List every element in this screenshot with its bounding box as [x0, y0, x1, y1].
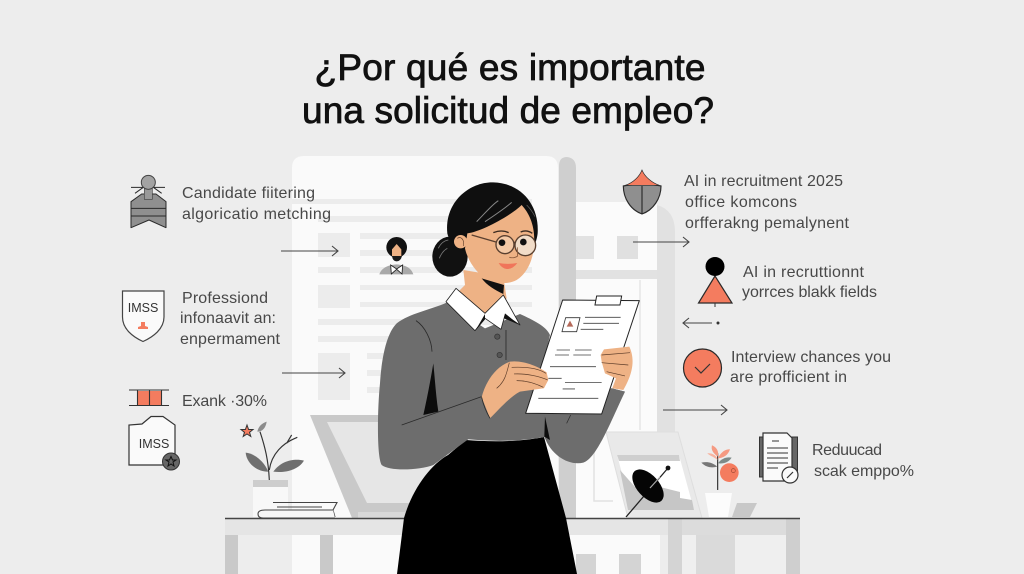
illustration: background documents [292, 156, 675, 520]
text: AI in recruitment: office komcons [685, 194, 797, 211]
text: candidate filtering: Candidate fiitering [182, 185, 315, 202]
illustration: desk [225, 518, 800, 574]
paper [526, 300, 639, 414]
text: AI in recruitment: AI in recruitment 2025 [684, 173, 843, 190]
illustration: laptop on desk [310, 415, 440, 518]
illustration: picture frame with black leaf [594, 432, 702, 518]
icon: coral columns [129, 390, 169, 406]
text: exank: Exank ·30% [182, 393, 267, 410]
text: professional [180, 290, 281, 348]
text: reduced: Reduucad [812, 442, 882, 459]
text: reduced [812, 442, 914, 480]
arrow [633, 237, 689, 247]
icon: coral check circle [684, 349, 722, 387]
illustration: potted plant right [701, 445, 757, 517]
illustration: small candidate avatar [379, 237, 413, 274]
icon: IMSS card [129, 416, 180, 470]
text: blank fields: AI in recruttionnt [743, 264, 865, 281]
text: blank fields: yorrces blakk fields [742, 284, 877, 301]
text: candidate filtering: algoricatio metching [182, 206, 331, 223]
arrow [281, 246, 338, 256]
collar [446, 288, 520, 331]
text: reduced: scak emppo% [814, 463, 914, 480]
text: interview chances: are profficient in [730, 369, 847, 386]
illustration: stack of books [258, 502, 337, 518]
icon: coral star [241, 425, 253, 436]
icon: person triangle [698, 257, 732, 307]
title: ¿Por qué es importante [314, 47, 706, 88]
icon: IMSS shield: IMSS [128, 301, 158, 315]
left hand [482, 361, 548, 418]
text: professional: enpermament [180, 331, 281, 348]
text: AI in recruitment: orfferakng pemalynent [685, 215, 850, 232]
icon: IMSS shield [122, 291, 164, 342]
text: interview chances [730, 349, 891, 386]
arrow [282, 368, 345, 378]
icon: coral shield [623, 170, 661, 214]
arrow [683, 318, 720, 328]
right hand [601, 347, 633, 390]
icon: document with clock [760, 433, 798, 483]
woman upper body [378, 182, 639, 469]
text: candidate filtering [182, 185, 331, 223]
text: blank fields [742, 264, 877, 301]
sweater torso and left arm [378, 303, 550, 469]
title: una solicitud de empleo? [302, 90, 714, 131]
icon: filtering badge [131, 175, 166, 228]
icon: IMSS card: IMSS [139, 437, 169, 451]
skirt [397, 437, 577, 574]
text: professional: Professiond [182, 290, 268, 307]
text: interview chances: Interview chances you [731, 349, 891, 366]
arrow [663, 405, 727, 415]
text: AI in recruitment [684, 173, 850, 232]
illustration: potted plant left [246, 422, 304, 517]
text: professional: infonaavit an: [180, 310, 276, 327]
right arm [544, 388, 625, 463]
title [302, 47, 714, 131]
illustration: woman holding application [378, 182, 639, 574]
